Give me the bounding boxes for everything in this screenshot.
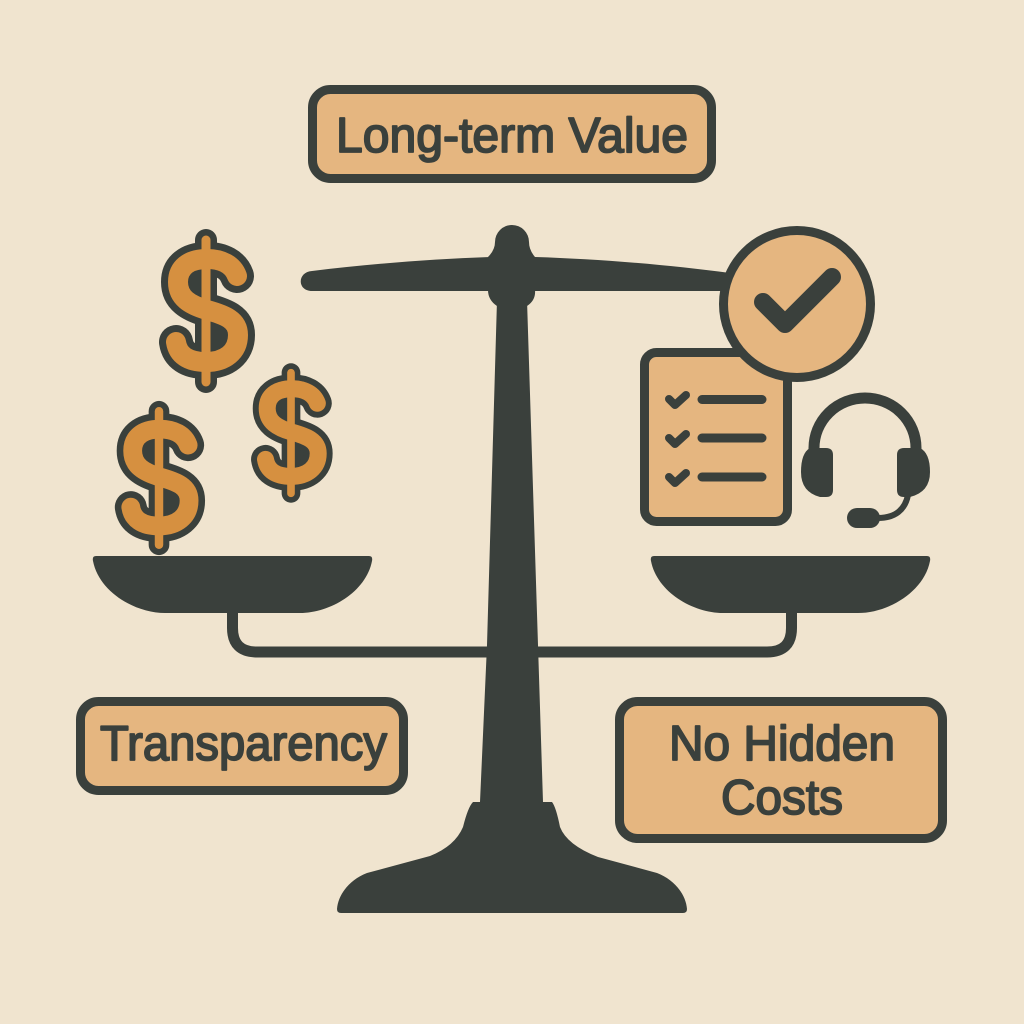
left pan (93, 556, 372, 613)
label: Transparency (80, 702, 404, 790)
icon: small dollar sign (266, 373, 318, 493)
label: Long-term Value: Long-term Value (336, 109, 688, 163)
icon: medium dollar sign (131, 411, 189, 545)
label: No Hidden Costs: No Hidden (669, 717, 895, 771)
icon: large dollar sign (176, 240, 238, 382)
label: No Hidden Costs (620, 702, 942, 838)
scale connector arm (232, 610, 792, 652)
label: Transparency: Transparency (100, 717, 387, 771)
scale beam (301, 257, 730, 291)
icon: check mark circle (724, 230, 870, 378)
scale hub (488, 225, 535, 306)
scale stand (337, 300, 687, 913)
label: No Hidden Costs: Costs (721, 771, 843, 825)
icon: checklist document (644, 352, 788, 522)
label: Long-term Value (312, 90, 712, 178)
right pan (651, 556, 930, 613)
icon: balance scale (93, 225, 930, 913)
icon: headset (801, 398, 930, 528)
